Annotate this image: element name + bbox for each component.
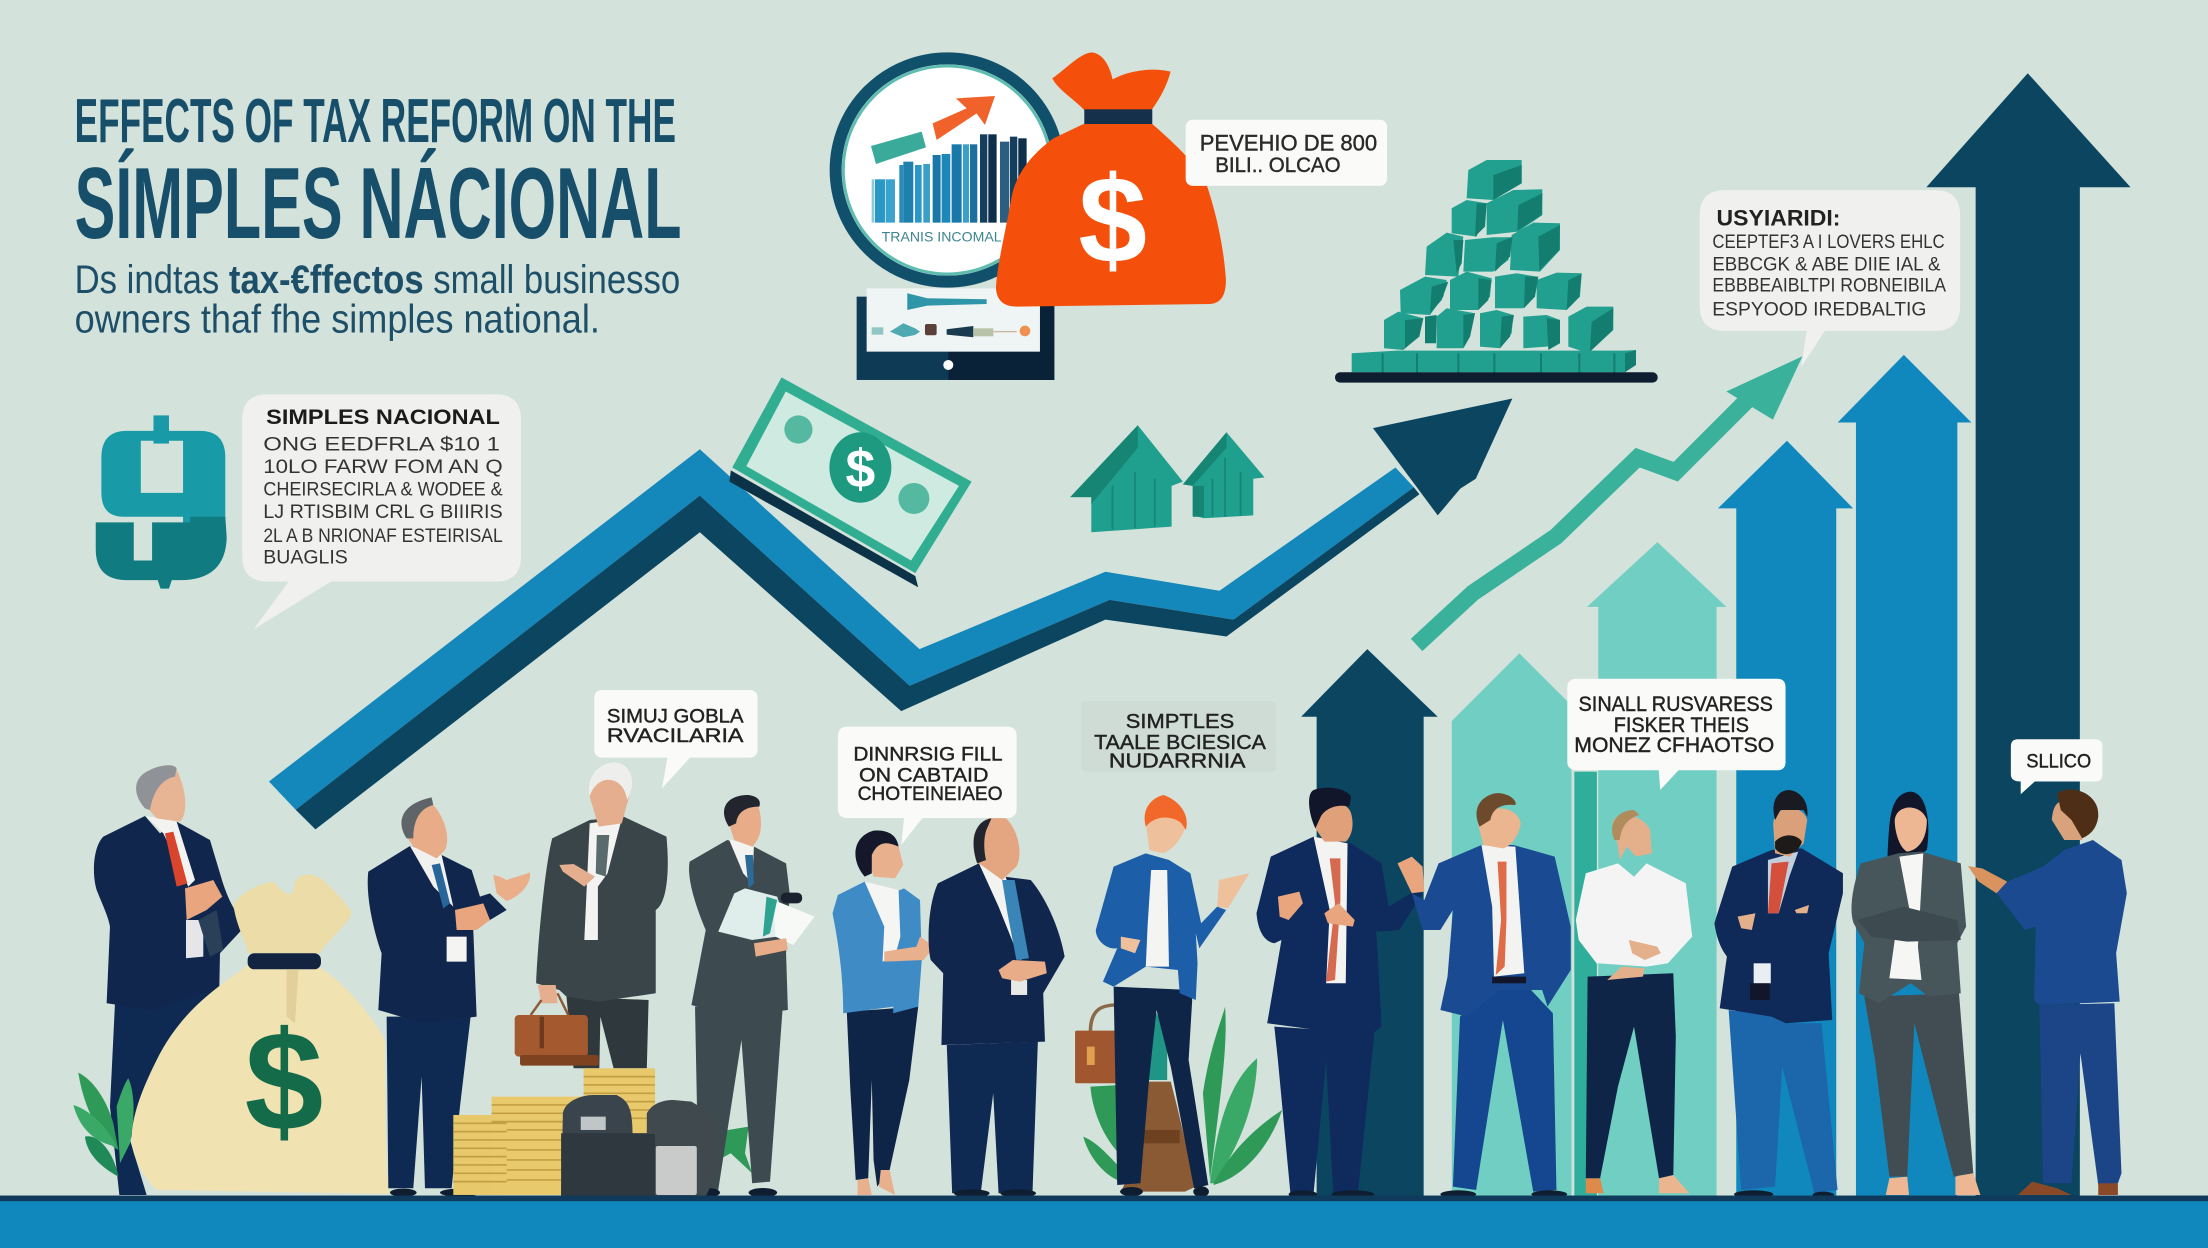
callout: small business: FISKER THEIS bbox=[1614, 714, 1749, 737]
icon: teal house arrows bbox=[1070, 425, 1265, 532]
person 7: orange haired woman bbox=[1096, 795, 1249, 1197]
callout: simples nacional: SIMPLES NACIONAL bbox=[266, 406, 500, 429]
icon: orange money bag: $ bbox=[1078, 152, 1147, 290]
ground bar bbox=[0, 1196, 2208, 1248]
callout: usyiaridi: USYIARIDI: bbox=[1717, 205, 1840, 230]
callout: simples nacional: CHEIRSECIRLA & WODEE & bbox=[263, 480, 503, 501]
chart bars bbox=[872, 134, 1027, 223]
callout: slligo bbox=[2011, 739, 2102, 794]
arrow: tallest navy column bbox=[1926, 73, 2131, 1200]
pyramid base bbox=[1335, 372, 1658, 383]
callout: simples nacional: 10LO FARW FOM AN Q bbox=[263, 457, 503, 478]
trend arrow blue band bbox=[269, 449, 1414, 810]
person 11: bearded man, jeans bbox=[1714, 790, 1843, 1198]
callout: simples nacional: BUAGLIS bbox=[263, 547, 348, 568]
column arrows bbox=[1301, 73, 2131, 1200]
person 6: man with blue tie, navy suit bbox=[929, 815, 1065, 1197]
teal band bbox=[871, 132, 926, 164]
person 5: woman in light blue bbox=[833, 830, 934, 1195]
subtitle: Ds indtas tax-€ffectos small businesso bbox=[75, 258, 680, 302]
callout: simples nacional: LJ RTISBIM CRL G BIIIRIS bbox=[263, 502, 503, 523]
callout: small business bbox=[1567, 679, 1786, 790]
icon: orange money bag bbox=[996, 52, 1226, 307]
icon: coin stacks bbox=[453, 1097, 592, 1195]
arrow: blue column left bbox=[1718, 441, 1853, 1200]
teal strip bbox=[1574, 772, 1597, 1200]
arrow: light teal column tall bbox=[1587, 542, 1726, 1200]
callout: usyiaridi: CEEPTEF3 A I LOVERS EHLC bbox=[1712, 232, 1945, 253]
callout: simuj gobla bbox=[594, 690, 758, 789]
callout: simples nacional bbox=[242, 394, 521, 629]
callout: small business: SINALL RUSVARESS bbox=[1579, 693, 1773, 716]
callout: simples nacional: 2L A B NRIONAF ESTEIRISAL bbox=[263, 526, 503, 547]
person 4: man in grey suit with papers bbox=[689, 795, 815, 1197]
person 8: man in navy with orange tie bbox=[1256, 788, 1424, 1198]
callout: simuj gobla: SIMUJ GOBLA bbox=[607, 705, 744, 727]
title: EFFECTS OF TAX REFORM ON THE bbox=[75, 87, 676, 156]
icon: left plant bbox=[73, 1073, 134, 1177]
callout: value label: BILI.. OLCAO bbox=[1215, 154, 1341, 177]
icon: dark case with label bbox=[561, 1095, 656, 1197]
icon: dark case with silver box bbox=[647, 1100, 718, 1197]
callout: simples nacional: ONG EEDFRLA $10 1 bbox=[263, 435, 500, 456]
arrow: blue column right bbox=[1838, 355, 1971, 1200]
callout: simptles label: SIMPTLES bbox=[1126, 711, 1234, 733]
person 2: man with blue tie bbox=[368, 797, 530, 1197]
orange arrow bbox=[933, 96, 995, 140]
icon: briefcase brown bbox=[515, 993, 599, 1066]
callout: usyiaridi: EBBBEAIBLTPI ROBNEIBILA bbox=[1712, 275, 1946, 296]
main trend arrow bbox=[269, 399, 1512, 829]
callout: small business: MONEZ CFHAOTSO bbox=[1574, 734, 1774, 757]
subtitle: owners thaf fhe simples national. bbox=[75, 297, 600, 341]
callout: value label: PEVEHIO DE 800 bbox=[1200, 131, 1377, 156]
icon: teal leaf behind cases bbox=[718, 1127, 752, 1173]
callout: dinnrsig fill: CHOTEINEIAEO bbox=[858, 783, 1003, 805]
callout: dinnrsig fill: DINNRSIG FILL bbox=[853, 743, 1003, 765]
trend arrow navy band bbox=[296, 487, 1419, 829]
callout: usyiaridi bbox=[1700, 190, 1960, 368]
icon: tablet bbox=[857, 288, 1054, 380]
title bbox=[75, 87, 682, 260]
callout: usyiaridi: ESPYOOD IREDBALTIG bbox=[1712, 299, 1926, 320]
callout: simptles label: NUDARRNIA bbox=[1109, 750, 1246, 772]
arrow: navy column short bbox=[1301, 649, 1438, 1200]
icon: magnifier chart circle bbox=[836, 58, 1059, 282]
callout: dinnrsig fill: ON CABTAID bbox=[859, 765, 989, 787]
person 13: man from behind, blue suit bbox=[1968, 789, 2127, 1195]
callout: simuj gobla: RVACILARIA bbox=[607, 725, 745, 747]
right group of figures bbox=[1576, 789, 2127, 1198]
callout: simptles label: TAALE BCIESICA bbox=[1094, 732, 1266, 754]
title: SÍMPLES NÁCIONAL bbox=[75, 147, 682, 260]
chart, tablet and orange bag cluster bbox=[836, 52, 1226, 380]
person 9: man in blue suit with orange tie bbox=[1412, 793, 1571, 1198]
chart caption: TRANIS INCOMAL bbox=[882, 229, 1002, 245]
callout: value label bbox=[1186, 120, 1387, 186]
callout: slligo: SLLICO bbox=[2026, 750, 2091, 772]
person 12: woman in grey suit bbox=[1852, 792, 1980, 1195]
icon: dollar bill: $ bbox=[846, 440, 875, 499]
icon: beige money bag bbox=[132, 874, 390, 1194]
icon: top coin stack bbox=[584, 1068, 655, 1133]
middle right group of figures bbox=[1075, 788, 1571, 1198]
person 3: white haired man in grey suit bbox=[536, 763, 668, 1068]
left group of figures bbox=[73, 765, 592, 1197]
callout: usyiaridi: EBBCGK & ABE DIIE IAL & bbox=[1712, 254, 1941, 275]
middle left group of figures bbox=[515, 763, 1065, 1197]
icon: second briefcase bbox=[1075, 1005, 1120, 1083]
icon: teal dollar emblem bbox=[96, 415, 227, 589]
person 10: man in white shirt bbox=[1576, 810, 1692, 1193]
icon: stacked money pyramid bbox=[1335, 160, 1658, 383]
icon: center plant with pot bbox=[1083, 1007, 1282, 1192]
green trend arrow bbox=[1417, 356, 1802, 645]
trend arrow head bbox=[1373, 399, 1512, 515]
person 1: grey haired man with red tie bbox=[94, 765, 243, 1195]
arrow: light teal column short bbox=[1452, 653, 1587, 1200]
callout: dinnrsig fill bbox=[838, 727, 1017, 845]
icon: dollar bill bbox=[729, 377, 972, 587]
papers bbox=[718, 888, 815, 945]
subtitle bbox=[75, 258, 680, 341]
icon: beige money bag: $ bbox=[245, 1003, 323, 1161]
callout: simptles label bbox=[1081, 701, 1276, 772]
